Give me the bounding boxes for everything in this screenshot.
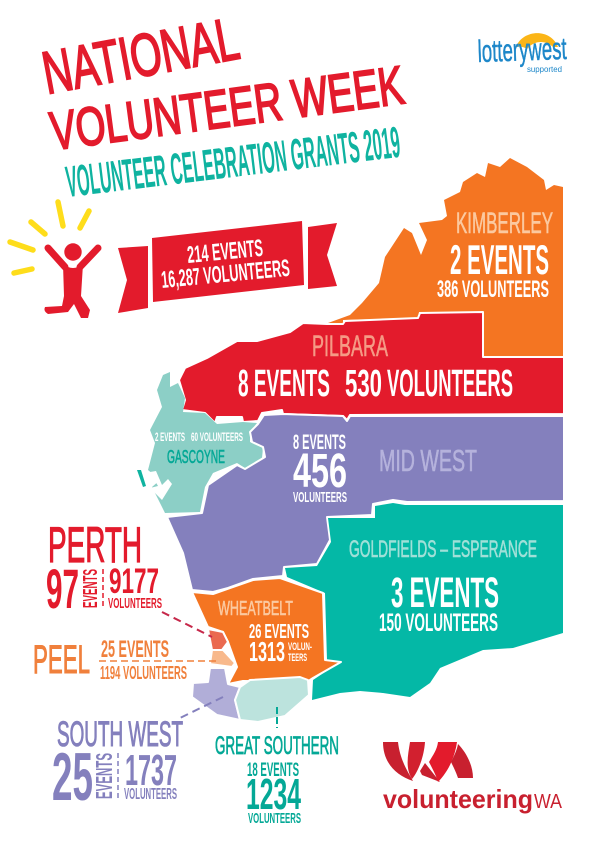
callout: South West: SOUTH WEST (57, 715, 183, 754)
callout: Perth (46, 517, 212, 637)
label: Goldfields-Esperance: 3 EVENTS (391, 569, 499, 617)
logo: volunteering WA: WA (534, 791, 563, 813)
region: South West (192, 668, 240, 720)
banner: totals: 214 EVENTS (186, 235, 264, 269)
callout: Peel: 25 EVENTS (101, 636, 169, 663)
icon: jumping volunteer with rays (10, 202, 98, 318)
label: Wheatbelt: 26 EVENTS (249, 621, 309, 643)
label: Gascoyne: 60 VOLUNTEERS (191, 432, 243, 444)
map of Western Australia (137, 158, 564, 722)
label: Pilbara (238, 330, 513, 405)
label: Mid West: 456 (293, 445, 347, 498)
callout: Perth: EVENTS (80, 569, 102, 608)
label: Pilbara: PILBARA (312, 330, 388, 363)
label: Wheatbelt: WHEATBELT (218, 598, 293, 620)
label: Wheatbelt (218, 598, 312, 667)
label: Goldfields-Esperance (349, 536, 537, 637)
label: Gascoyne: 2 EVENTS (155, 432, 185, 444)
callout: Perth: PERTH (48, 517, 142, 573)
banner: totals: 16,287 VOLUNTEERS (160, 255, 291, 294)
label: Wheatbelt: VOLUN- (288, 641, 312, 653)
callout: Great Southern: VOLUNTEERS (248, 810, 301, 827)
callout: Great Southern (215, 707, 339, 827)
label: Mid West (293, 431, 477, 506)
callout: South West: 25 (52, 739, 93, 815)
region: Kimberley (328, 158, 563, 356)
callout: Great Southern: 18 EVENTS (247, 760, 299, 781)
region: Pilbara (179, 312, 564, 423)
logo: lotterywest (477, 31, 567, 74)
callout: South West: VOLUNTEERS (124, 786, 177, 803)
callout: Great Southern: 1234 (246, 770, 301, 819)
logo: lotterywest: supported (527, 64, 562, 74)
label: Wheatbelt: 1313 (249, 636, 285, 667)
region: Wheatbelt (192, 578, 341, 684)
label: Mid West: MID WEST (379, 443, 477, 478)
logo: volunteering WA: volunteering (383, 784, 533, 814)
title (37, 5, 407, 162)
region: Peel (210, 650, 235, 667)
label: Goldfields-Esperance: 150 VOLUNTEERS (379, 609, 498, 637)
label: Kimberley (437, 207, 553, 303)
region: Gascoyne (148, 372, 263, 513)
callout: South West: 1737 (125, 746, 177, 795)
island: Dirk Hartog (137, 470, 146, 487)
region: Great Southern (235, 677, 309, 722)
label: Gascoyne (155, 432, 243, 467)
banner: totals (118, 221, 337, 313)
callout: Peel (33, 636, 220, 683)
bay: Shark Bay (150, 471, 172, 500)
title: VOLUNTEER WEEK (47, 55, 407, 162)
callout: Peel: PEEL (33, 638, 90, 682)
region: Goldfields-Esperance (285, 503, 563, 700)
region: Mid West (167, 414, 564, 592)
label: Gascoyne: GASCOYNE (167, 447, 225, 467)
label: Pilbara: 8 EVENTS (238, 363, 330, 405)
callout: Perth: VOLUNTEERS (108, 596, 162, 612)
callout: Perth: 9177 (109, 562, 159, 601)
region: Perth (208, 629, 228, 650)
callout: Peel: 1194 VOLUNTEERS (100, 663, 187, 683)
logo: volunteering WA (383, 742, 563, 814)
label: Mid West: 8 EVENTS (293, 431, 346, 454)
callout: South West (52, 697, 223, 815)
callout: South West: EVENTS (91, 753, 117, 799)
callout: Great Southern: GREAT SOUTHERN (215, 732, 339, 760)
label: Mid West: VOLUNTEERS (293, 489, 347, 506)
callout: Perth: 97 (46, 557, 79, 620)
label: Pilbara: 530 (345, 363, 382, 405)
label: Wheatbelt: TEERS (288, 652, 307, 664)
